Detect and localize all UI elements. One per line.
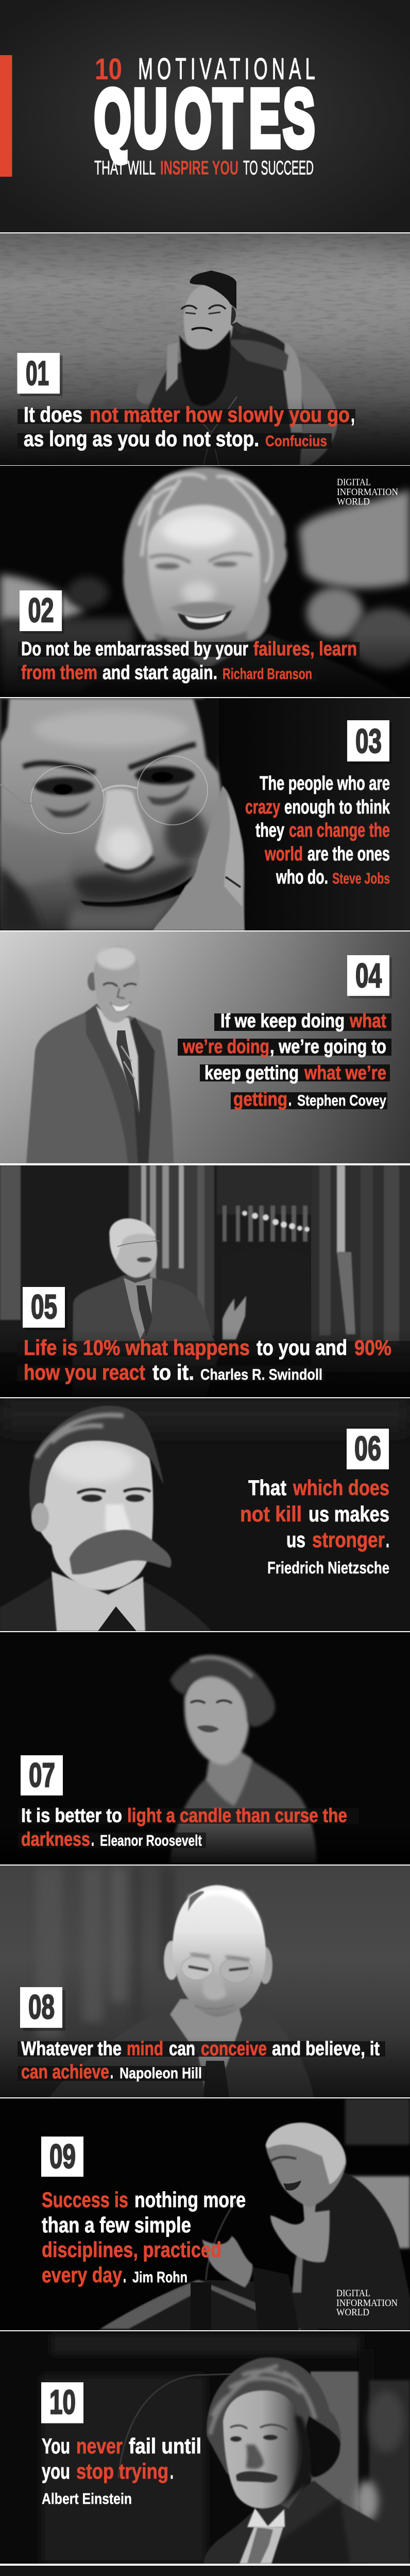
quote 07 [18, 1805, 359, 1851]
quote 08 [18, 2038, 385, 2083]
quote 08: mind [127, 2038, 163, 2060]
watermark: WORLD [336, 2307, 369, 2318]
portrait: Steve Jobs [0, 698, 410, 930]
quote 03: world [264, 843, 303, 865]
quote 05: 90% [354, 1335, 391, 1360]
number badge 07: 07 [29, 1756, 55, 1794]
number badge 06: 06 [354, 1429, 381, 1467]
quote 03: they [255, 820, 284, 841]
watermark [337, 477, 398, 507]
watermark: INFORMATION [336, 2298, 398, 2309]
panel 02: Richard Branson [0, 466, 410, 697]
quote 08: Napoleon Hill [119, 2065, 202, 2082]
watermark: DIGITAL [337, 477, 371, 488]
quote 02 [18, 638, 360, 684]
quote 09: . [123, 2263, 126, 2287]
quote 06: us [286, 1528, 305, 1552]
quote 02: Do not be embarrassed by your [21, 638, 248, 660]
watermark: INFORMATION [337, 487, 398, 498]
quote 10: Albert Einstein [42, 2490, 132, 2507]
title: 10 motivational: MOTIVATIONAL [138, 53, 315, 86]
quote 06: stronger [312, 1528, 385, 1552]
number badge 03: 03 [355, 722, 382, 760]
quote 08: and believe, it [272, 2038, 380, 2060]
portrait: Charles Swindoll and organ [0, 1165, 410, 1397]
quote 04: getting [233, 1089, 287, 1110]
quote 06: . [386, 1528, 389, 1552]
quote 10: You [42, 2434, 70, 2458]
quote 04: If we keep doing [220, 1010, 345, 1032]
quote 09: than a few simple [42, 2213, 191, 2237]
quote 01: It does [24, 402, 82, 427]
number badge 05: 05 [31, 1287, 57, 1326]
number badge 04: 04 [355, 956, 382, 994]
quote 02: and start again. [102, 662, 217, 684]
quote 01 [18, 402, 355, 451]
quote 04 [178, 1010, 391, 1110]
portrait: Eleanor Roosevelt [0, 1632, 410, 1865]
quote 06: not kill [240, 1502, 302, 1526]
quote 08: can [169, 2038, 195, 2060]
quote 08: can achieve [21, 2061, 109, 2083]
quote 05: to it. [152, 1360, 194, 1384]
quote 09: disciplines, practiced [42, 2238, 221, 2262]
panel 08: Napoleon Hill [0, 1866, 410, 2097]
title: 10 motivational: 10 [95, 53, 122, 86]
panel 07: Eleanor Roosevelt [0, 1632, 410, 1865]
number badge 01: 01 [26, 354, 49, 392]
watermark: DIGITAL [336, 2288, 370, 2299]
quote 09: nothing more [134, 2188, 246, 2212]
panel 03: Steve Jobs [0, 698, 410, 930]
watermark: WORLD [337, 497, 370, 507]
quote 10: never [76, 2434, 123, 2458]
quote 02: from them [21, 662, 97, 684]
quote 09: Jim Rohn [132, 2269, 187, 2286]
panel 10: Albert Einstein [0, 2331, 410, 2564]
footer panel [0, 2566, 410, 2576]
quote 06: us makes [309, 1502, 389, 1526]
portrait: Napoleon Hill [0, 1866, 410, 2097]
panel 04: Stephen Covey [0, 931, 410, 1163]
quote 05: Life is 10% what happens [24, 1335, 250, 1360]
number badge 09: 09 [49, 2137, 76, 2175]
quote 08: conceive [201, 2038, 267, 2060]
quote 04: what we’re [304, 1062, 386, 1084]
panel 05: Charles R. Swindoll [0, 1165, 410, 1397]
quote 07: It is better to [21, 1805, 122, 1827]
portrait: Confucius painting [0, 233, 410, 465]
quote 05: Charles R. Swindoll [200, 1366, 322, 1383]
quote 04: Stephen Covey [297, 1092, 386, 1109]
portrait: Albert Einstein [0, 2331, 410, 2564]
subtitle: THAT WILL [94, 158, 156, 179]
watermark [336, 2288, 398, 2318]
subtitle: INSPIRE YOU [160, 158, 238, 179]
number badge 03 [347, 720, 392, 764]
subtitle [94, 158, 314, 179]
panel 06: Friedrich Nietzsche [0, 1398, 410, 1631]
quote 10: you [42, 2459, 70, 2483]
portrait: Jim Rohn [0, 2098, 410, 2330]
quote 03: who do. [276, 867, 328, 888]
quote 01: as long as you do not stop. [24, 427, 259, 451]
quote 08: Whatever the [21, 2038, 122, 2060]
quote 07: Eleanor Roosevelt [100, 1832, 202, 1850]
quote 06 [240, 1476, 389, 1577]
portrait: Friedrich Nietzsche [0, 1398, 410, 1631]
quote 09 [42, 2188, 246, 2287]
number badge 08: 08 [28, 1988, 55, 2026]
number badge 02 [20, 590, 64, 634]
quote 10: stop trying [76, 2459, 168, 2483]
header panel [0, 0, 410, 232]
quote 06: which does [293, 1476, 389, 1500]
quote 10: fail until [129, 2434, 201, 2458]
quote 07: . [91, 1829, 94, 1851]
panel 09: Jim Rohn [0, 2098, 410, 2330]
quote 05 [17, 1335, 410, 1384]
title: quotes: QUOTES [94, 73, 315, 164]
number badge 10 [41, 2382, 83, 2424]
quote 01: , [351, 402, 355, 427]
quote 02: Richard Branson [223, 666, 312, 683]
quote 10: . [170, 2459, 174, 2483]
quote 10 [42, 2434, 201, 2507]
quote 01: Confucius [265, 433, 327, 450]
quote 03 [245, 773, 390, 888]
quote 05: how you react [24, 1360, 145, 1384]
quote 04: keep getting [204, 1062, 299, 1084]
number badge 02: 02 [28, 591, 54, 629]
quote 04: . [288, 1089, 292, 1110]
panel 01: Confucius [0, 233, 410, 465]
quote 07: darkness [21, 1829, 90, 1851]
red accent bar [0, 55, 12, 177]
portrait: Richard Branson [0, 466, 410, 697]
quote 05: to you and [257, 1335, 347, 1360]
number badge 10: 10 [49, 2383, 76, 2421]
quote 08: . [110, 2061, 113, 2083]
quote 02: failures, learn [253, 638, 357, 660]
quote 09: every day [42, 2263, 123, 2287]
quote 04: what [349, 1010, 386, 1032]
quote 07: light a candle than curse the [127, 1805, 347, 1827]
quote 03: crazy [245, 796, 280, 818]
quote 04: , we’re going to [270, 1036, 386, 1058]
quote 09: Success is [42, 2188, 128, 2212]
subtitle: TO SUCCEED [243, 158, 314, 179]
quote 01: not matter how slowly you go [90, 402, 350, 427]
portrait: Stephen Covey [0, 931, 410, 1163]
quote 04: we’re doing [182, 1036, 269, 1058]
quote 06: That [248, 1476, 286, 1500]
